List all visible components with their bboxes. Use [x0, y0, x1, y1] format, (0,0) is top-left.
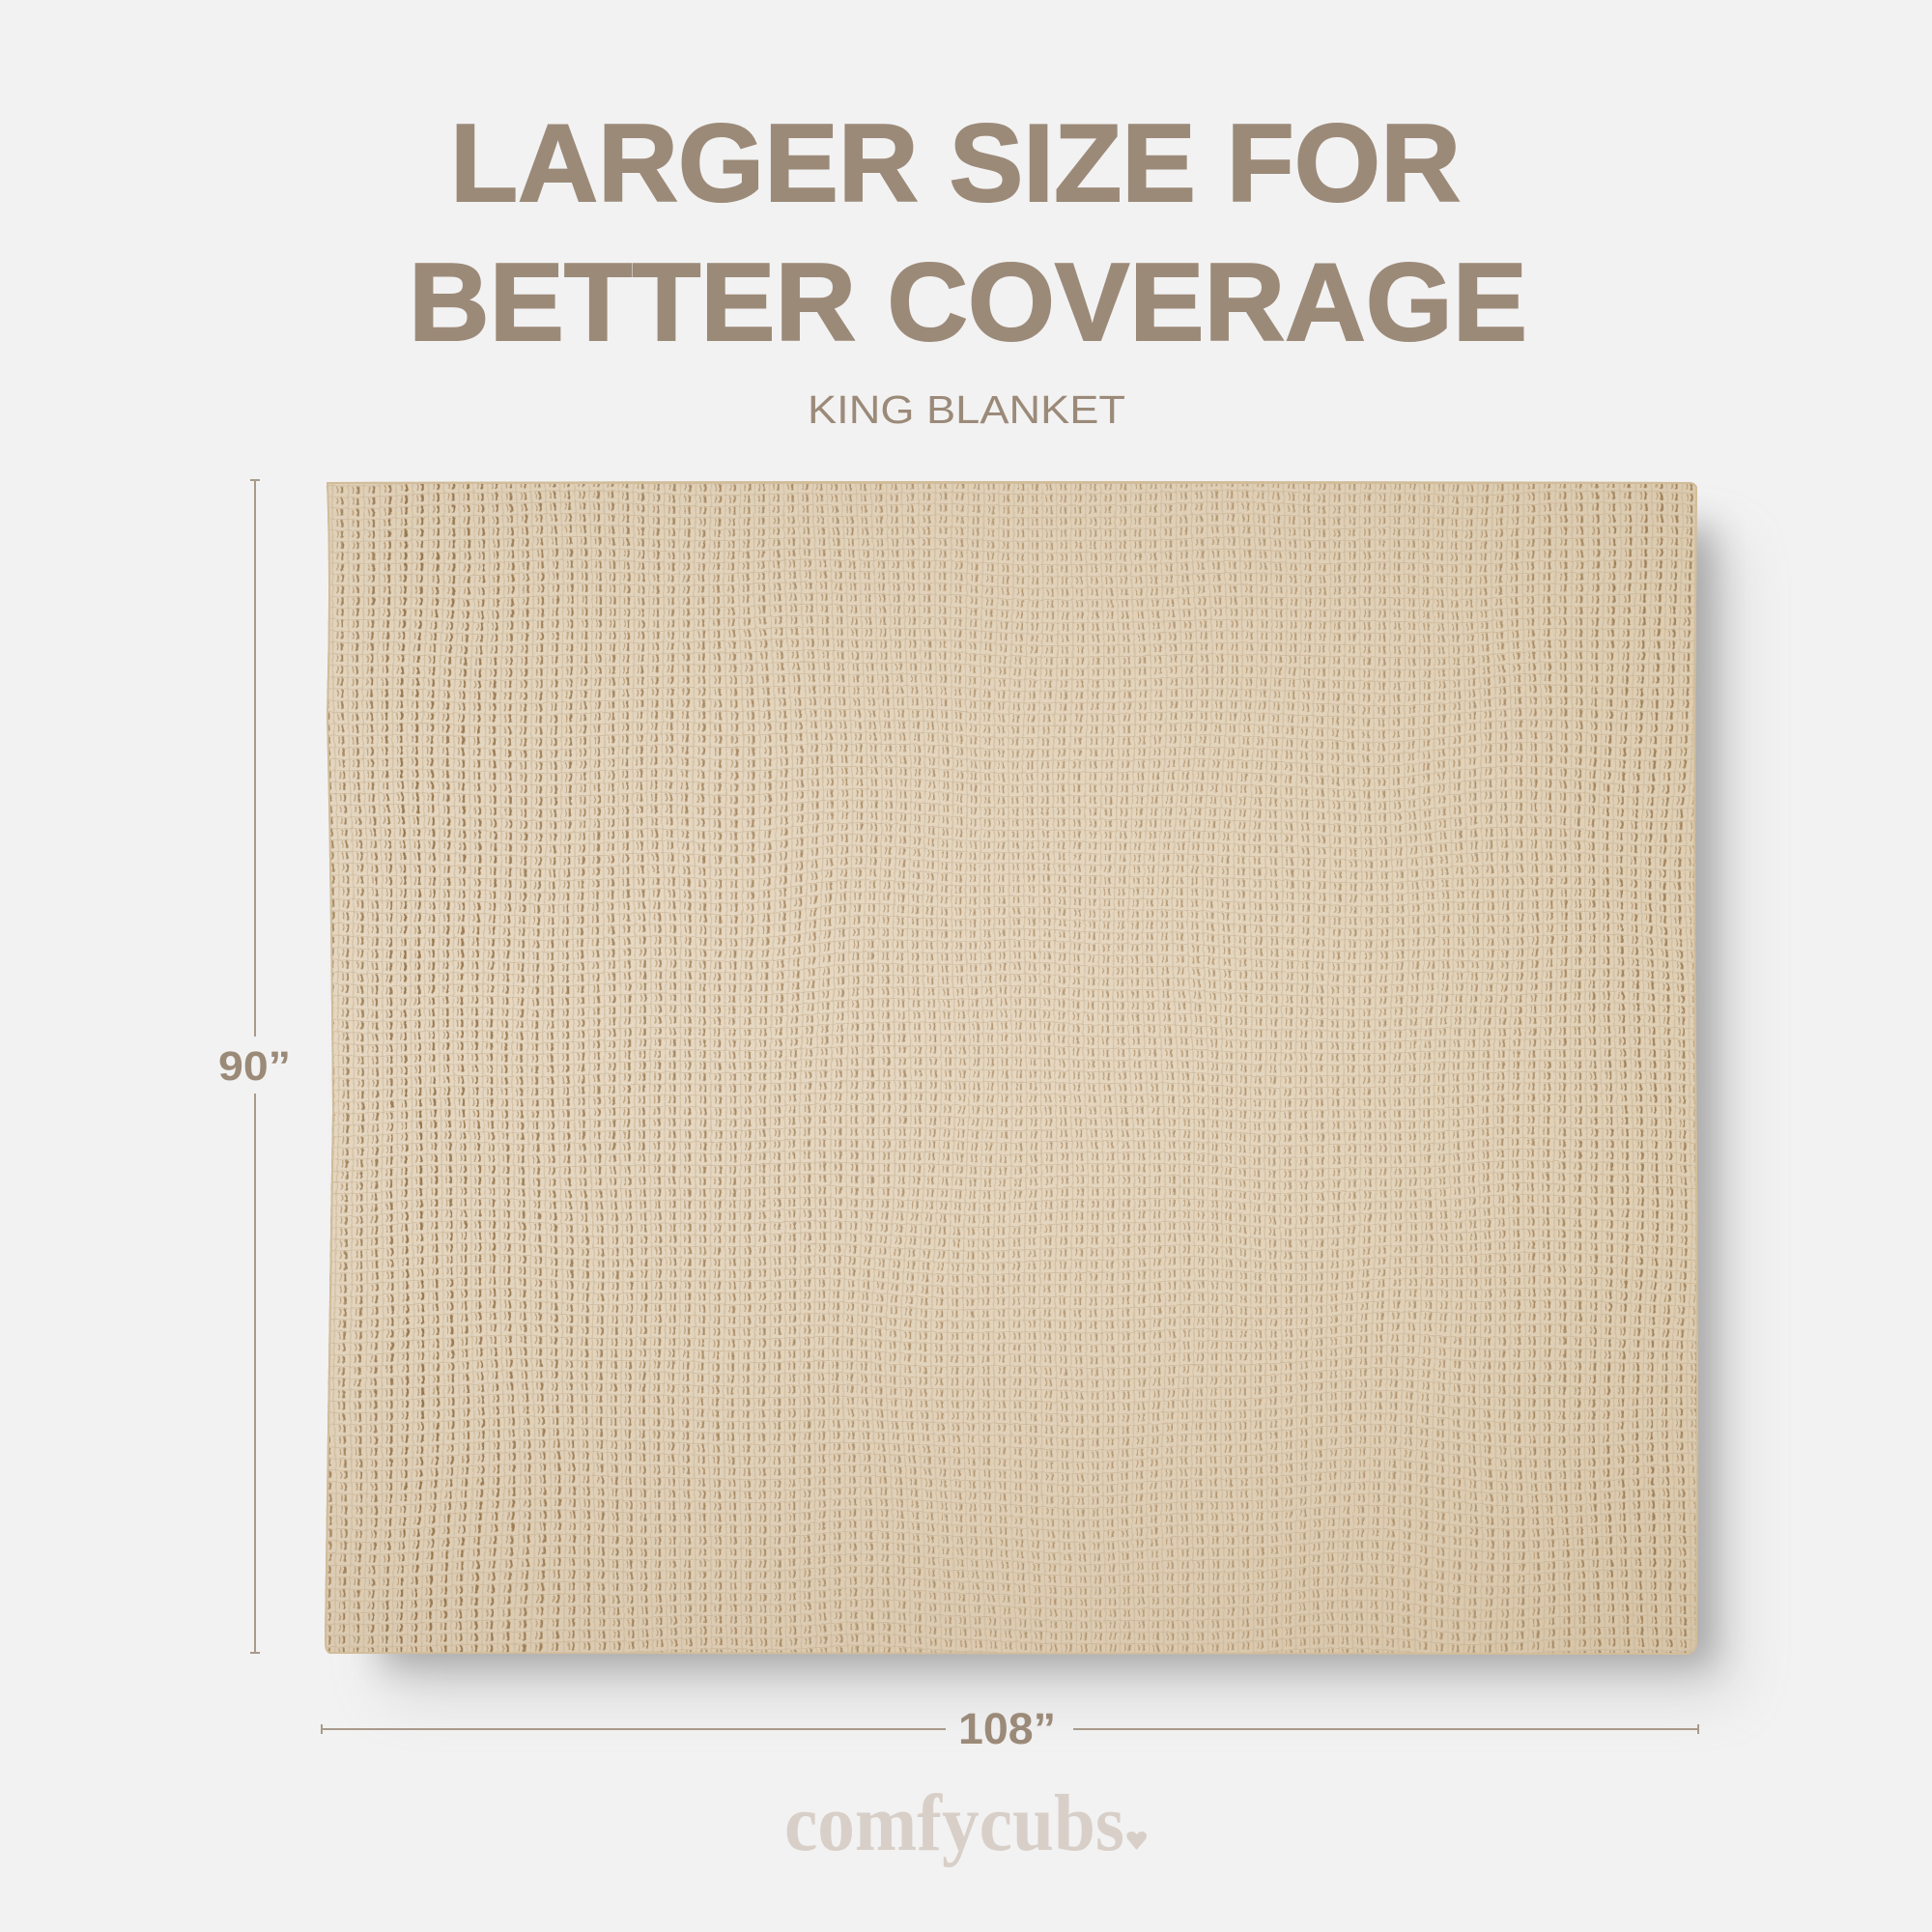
blanket drop shadow: [382, 526, 1734, 1695]
title: BETTER COVERAGE: [409, 242, 1527, 364]
icon: heart: [1126, 1832, 1147, 1850]
height dimension: 90 inches: 90”: [218, 1043, 291, 1090]
subtitle: KING BLANKET: [808, 387, 1125, 432]
height dimension: 90 inches: [218, 480, 291, 1653]
blanket: [325, 481, 1698, 1655]
width dimension: 108 inches: 108”: [958, 1704, 1056, 1753]
width dimension: 108 inches: [322, 1704, 1698, 1753]
logo: comfycubs: comfycubs: [784, 1778, 1124, 1868]
title: LARGER SIZE FOR: [450, 102, 1461, 225]
title: [409, 102, 1527, 364]
